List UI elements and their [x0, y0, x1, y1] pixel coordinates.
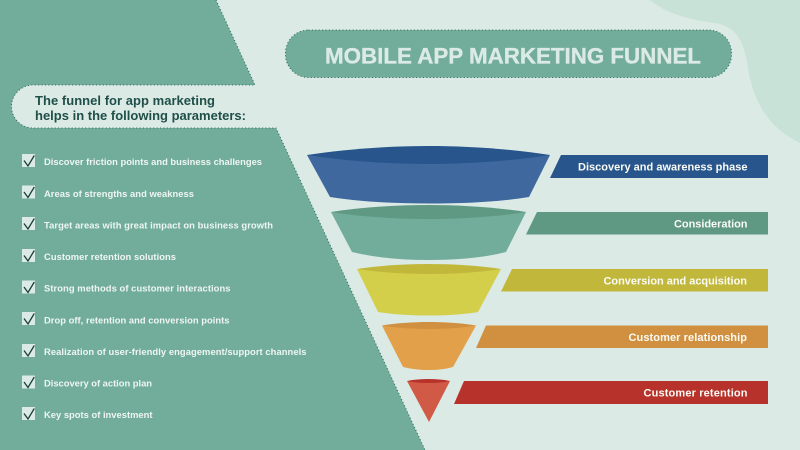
item: friction points: Discover friction points and business challenges — [44, 156, 262, 167]
funnel tier: conversion — [357, 264, 501, 316]
heading: funnel parameters intro — [35, 93, 246, 123]
label bar: consideration: Consideration — [674, 218, 748, 230]
label bar: conversion: Conversion and acquisition — [604, 276, 747, 288]
label bar: discovery — [550, 155, 768, 178]
label bar: retention: Customer retention — [644, 388, 748, 400]
funnel tier: consideration — [331, 205, 526, 260]
item: target areas: Target areas with great impact on business growth — [44, 220, 273, 230]
item: interactions: Strong methods of customer interactions — [44, 283, 230, 294]
label bar: conversion — [501, 269, 768, 292]
label bar: discovery: Discovery and awareness phase — [578, 162, 748, 174]
item: investment: Key spots of investment — [44, 409, 152, 420]
item: strengths: Areas of strengths and weakness — [44, 188, 194, 199]
item: engagement channels: Realization of user-friendly engagement/support channels — [44, 346, 306, 357]
title banner: MOBILE APP MARKETING FUNNEL — [325, 44, 701, 68]
heading: funnel parameters intro: The funnel for app marketing — [35, 93, 215, 108]
item: retention solutions: Customer retention solutions — [44, 251, 176, 262]
decorative corner blob — [650, 0, 800, 143]
item: action plan: Discovery of action plan — [44, 378, 152, 388]
label bar: consideration — [526, 212, 768, 234]
funnel tier: relationship — [382, 322, 476, 370]
funnel tier: discovery — [307, 146, 550, 204]
checklist — [22, 154, 306, 420]
label bar: retention — [454, 381, 768, 404]
funnel tier: retention — [407, 379, 450, 422]
label bar: relationship — [476, 326, 768, 348]
label bar: relationship: Customer relationship — [628, 332, 747, 344]
item: drop off: Drop off, retention and conversion points — [44, 314, 230, 326]
panel: left parameters — [0, 0, 425, 450]
title banner — [286, 30, 732, 78]
heading: funnel parameters intro: helps in the following parameters: — [35, 108, 246, 123]
